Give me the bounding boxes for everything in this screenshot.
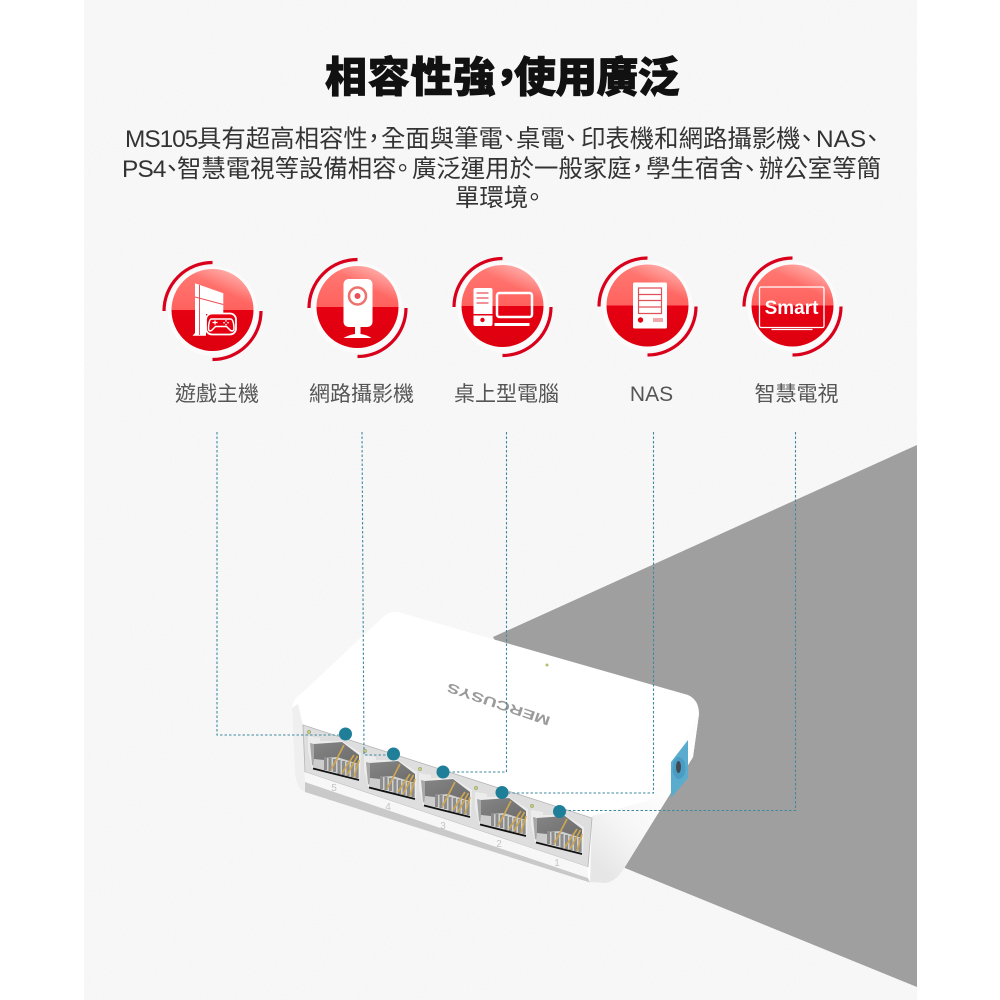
description text: 具有超高相容性， xyxy=(197,126,380,153)
switch left edge xyxy=(292,704,305,792)
port numbers xyxy=(331,783,560,869)
status LED xyxy=(546,664,548,666)
icon: smart TV: Smart xyxy=(765,298,819,319)
description text xyxy=(122,126,881,212)
description text: 學生宿舍、 xyxy=(646,156,756,183)
description text: 辦公室等簡 xyxy=(759,156,881,183)
switch body xyxy=(292,612,699,883)
port numbers: 5 xyxy=(331,783,337,794)
description text: MS105 xyxy=(125,126,198,153)
power jack xyxy=(671,740,688,798)
icon labels: 桌上型電腦 xyxy=(454,383,559,406)
description text: 單環境。 xyxy=(455,185,540,212)
connector dots xyxy=(339,728,566,818)
icon: desktop computer xyxy=(454,258,551,356)
description text: NAS、 xyxy=(816,126,878,153)
connector lines xyxy=(217,432,796,810)
icon labels: NAS xyxy=(630,383,673,406)
icon: game console xyxy=(164,262,261,360)
description text: 印表機和網路攝影機、 xyxy=(581,126,813,153)
icon: smart TV xyxy=(744,258,841,355)
ethernet ports xyxy=(307,730,584,854)
switch front shadow xyxy=(305,782,590,882)
port numbers: 3 xyxy=(440,821,446,832)
description text: 廣泛運用於一般家庭， xyxy=(412,156,644,183)
description text: 全面與筆電、 xyxy=(381,126,515,153)
switch right side face xyxy=(590,714,699,883)
port recess xyxy=(303,725,592,867)
description text: PS4、 xyxy=(122,156,177,183)
icon labels: 網路攝影機 xyxy=(309,383,414,406)
port numbers: 2 xyxy=(496,839,502,850)
label strip xyxy=(305,772,588,878)
brand logo: MERCUSYS xyxy=(445,680,552,729)
description text: 桌電、 xyxy=(516,126,577,153)
port numbers: 1 xyxy=(554,858,560,869)
title: 相容性強， xyxy=(325,54,518,101)
network switch xyxy=(292,612,699,883)
icon labels xyxy=(175,383,838,406)
gray light beam xyxy=(493,445,917,987)
icon labels: 遊戲主機 xyxy=(175,383,259,406)
title: 使用廣泛 xyxy=(514,54,680,101)
description text: 智慧電視等設備相容。 xyxy=(177,156,409,183)
icon labels: 智慧電視 xyxy=(754,383,838,406)
icon: NAS xyxy=(599,258,696,355)
icon: network camera xyxy=(309,260,406,356)
port numbers: 4 xyxy=(385,802,391,813)
